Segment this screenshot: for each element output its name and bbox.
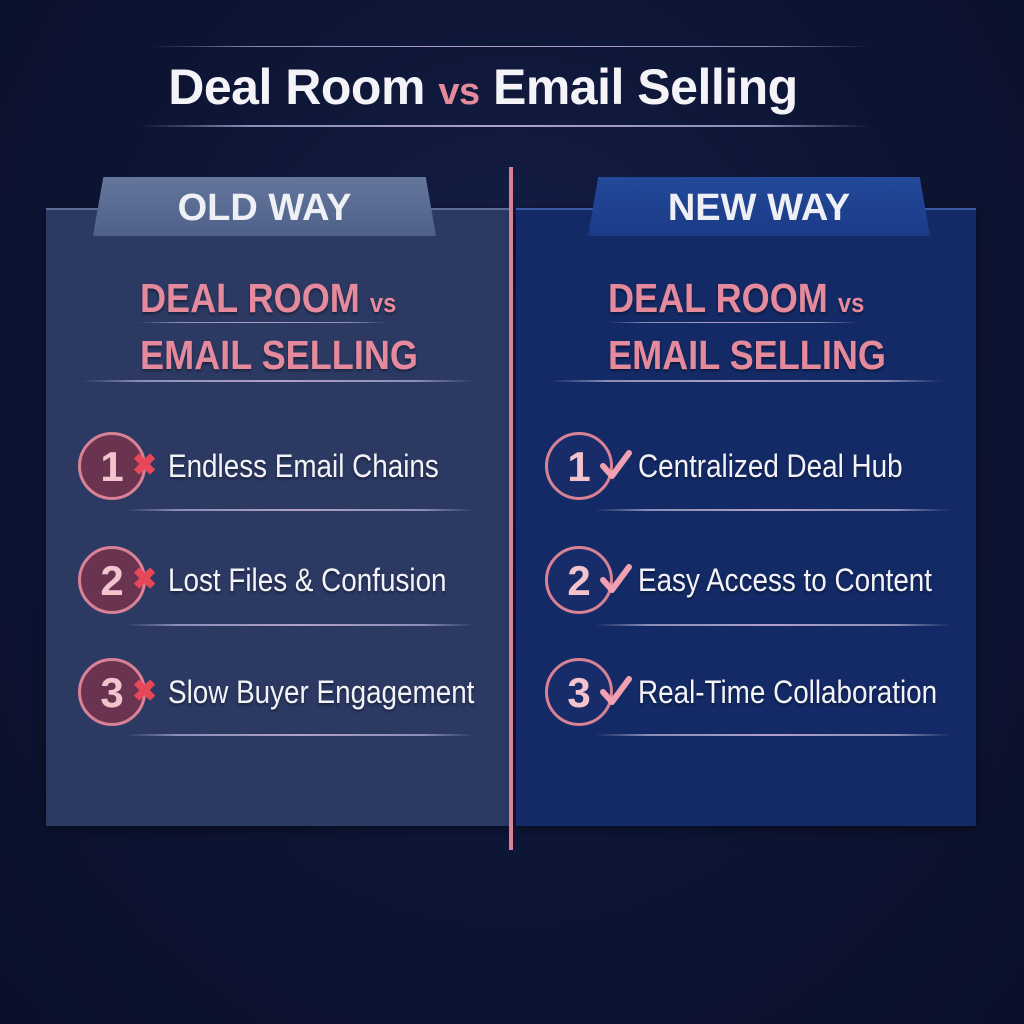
subtitle: new: DEAL ROOM vs: [608, 275, 864, 321]
new item 1: Centralized Deal Hub: [638, 448, 903, 484]
subtitle: new: [608, 275, 886, 378]
old item 2: [78, 546, 447, 614]
new item 2: 2: [567, 557, 591, 604]
icon: check: [600, 450, 632, 479]
old item 2: 2: [100, 557, 124, 604]
new item 3: 3: [567, 669, 591, 716]
tab: new way: [588, 177, 930, 236]
old item 1: 1: [100, 443, 124, 490]
subtitle: old: EMAIL SELLING: [140, 332, 418, 378]
old item 3: Slow Buyer Engagement: [168, 674, 474, 710]
old item 2: ✖: [132, 563, 157, 596]
new item 3: [545, 658, 937, 726]
new item 1: 1: [567, 443, 591, 490]
icon: check: [600, 564, 632, 593]
old item 3: [78, 658, 474, 726]
tab: old way: OLD WAY: [178, 187, 351, 229]
old item 1: [78, 432, 439, 500]
tab: old way: [93, 177, 436, 236]
new item 2: [545, 546, 932, 614]
new item 1: [545, 432, 903, 500]
subtitle: old: [140, 275, 418, 378]
new item 3: Real-Time Collaboration: [638, 674, 937, 710]
new item 2: Easy Access to Content: [638, 562, 932, 598]
center divider: [509, 167, 513, 850]
panel: new way: [516, 208, 976, 826]
subtitle: new: EMAIL SELLING: [608, 332, 886, 378]
old item 2: Lost Files & Confusion: [168, 562, 447, 598]
subtitle: old: DEAL ROOM vs: [140, 275, 396, 321]
old item 3: ✖: [132, 675, 157, 708]
title: Deal Room vs Email Selling: [168, 59, 798, 115]
old item 1: ✖: [132, 449, 157, 482]
tab: new way: NEW WAY: [668, 187, 850, 229]
old item 3: 3: [100, 669, 124, 716]
icon: check: [600, 676, 632, 705]
title rule bottom: [140, 125, 870, 127]
old item 1: Endless Email Chains: [168, 448, 439, 484]
title rule top: [150, 46, 870, 47]
panel: old way: [46, 208, 510, 826]
